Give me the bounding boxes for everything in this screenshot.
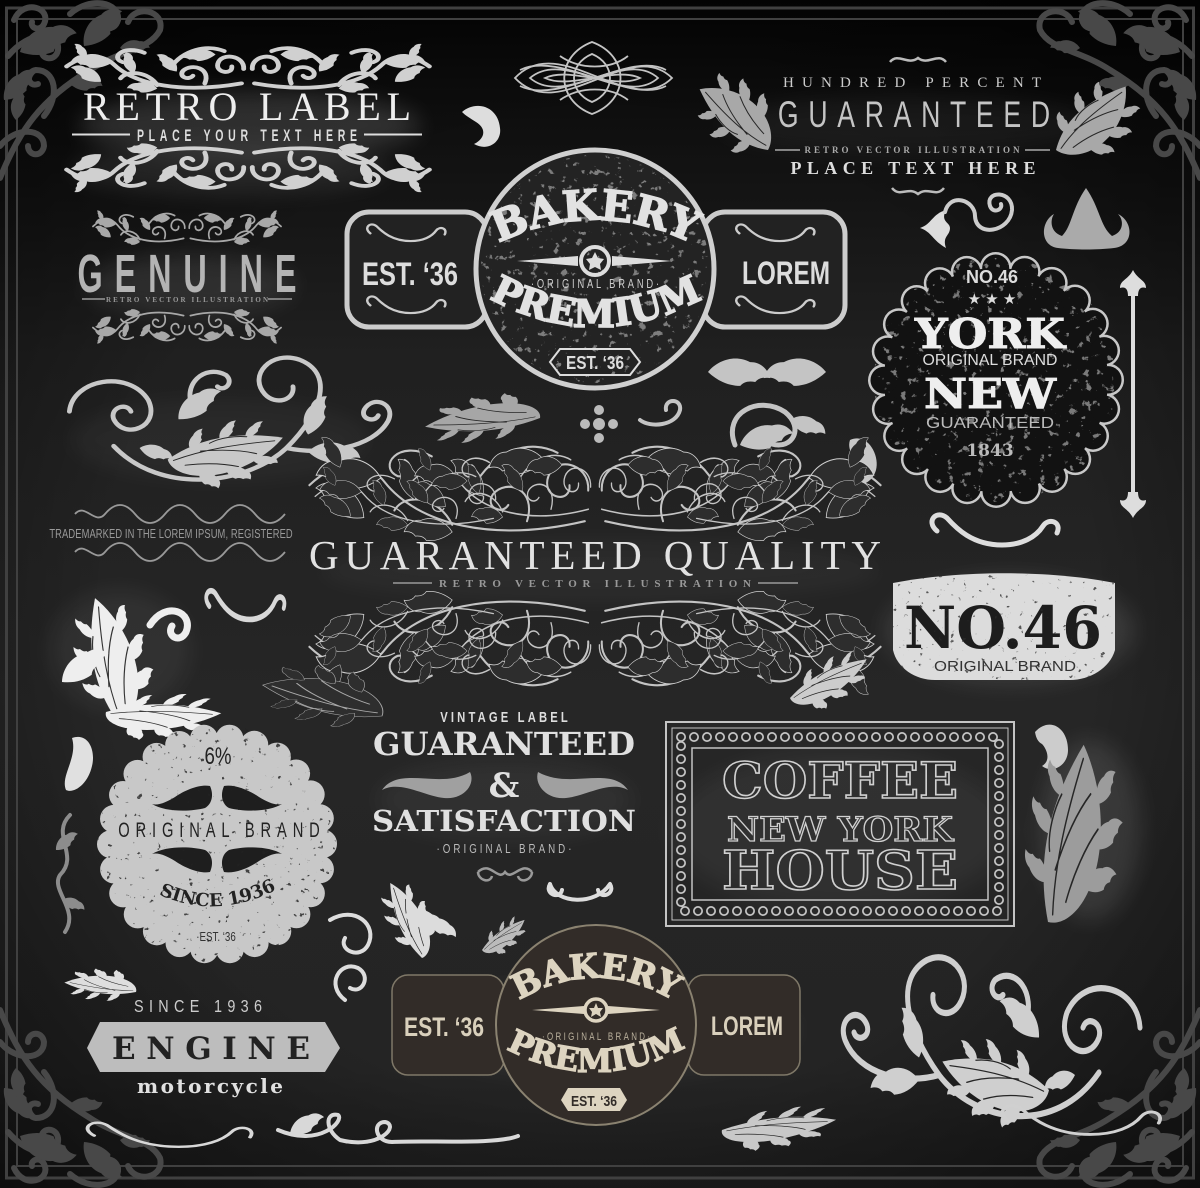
original brand: ORIGINAL BRAND [118, 818, 320, 842]
original brand: ·ORIGINAL BRAND· [542, 1031, 650, 1043]
icon: small leaf [849, 438, 877, 485]
subtitle: motorcycle [137, 1074, 283, 1098]
wear [98, 725, 336, 963]
bakery: BAKERY [508, 952, 686, 1000]
ornament: small swirl [945, 194, 1012, 230]
label: genuine [77, 209, 296, 345]
ornament: top centre knot [515, 42, 672, 114]
est tag: EST. ‘36 [571, 1093, 617, 1110]
frame: coffee new york house [666, 722, 1014, 926]
percentage: 6% [204, 743, 232, 770]
badge: york new [874, 258, 1118, 502]
ornament: scroll right [732, 405, 829, 452]
heading 2: SATISFACTION [372, 804, 636, 838]
ornament: bottom [309, 588, 881, 699]
est: ·EST. ‘36 [196, 931, 236, 944]
est tag: EST. ‘36 [566, 353, 624, 373]
swirl row top [75, 505, 285, 523]
caption: RETRO VECTOR ILLUSTRATION [804, 145, 1020, 155]
ornament: top flourish [67, 42, 429, 94]
scallop [111, 738, 323, 950]
original brand: ORIGINAL BRAND [922, 352, 1058, 369]
scallop outer [884, 268, 1108, 492]
label: vintage guaranteed satisfaction [372, 708, 636, 880]
left panel: EST. ‘36 [362, 256, 458, 292]
new: NEW [924, 370, 1057, 418]
ornament: white scroll [45, 585, 225, 752]
ornament: left acanthus [685, 66, 786, 164]
subtitle: PLACE TEXT HERE [790, 158, 1036, 178]
icon: small leaf [920, 210, 950, 248]
ornament: wave right [932, 515, 1058, 545]
premium text: PREMIUM [489, 273, 703, 328]
ornament: vertical rod [1120, 270, 1146, 518]
ornament: bottom wave right [1002, 1106, 1160, 1134]
frame lines [666, 722, 1014, 926]
heading: retro label: RETRO LABEL [83, 84, 411, 129]
no.46: NO.46 [966, 267, 1018, 287]
heading: ENGINE [112, 1031, 310, 1067]
ornament: small top right leaf [1035, 725, 1068, 769]
ornament: bottom wave left [88, 1123, 252, 1147]
wear [874, 258, 1118, 502]
star rule [517, 247, 672, 275]
label: guaranteed quality [309, 433, 881, 699]
ornament: vertical scroll left [52, 815, 87, 932]
heading: GUARANTEED QUALITY [309, 532, 881, 578]
label: hundred percent guaranteed [775, 58, 1050, 194]
right panel [703, 212, 845, 327]
ornament: small bottom scroll [892, 188, 944, 194]
ornament: top [309, 433, 881, 544]
heading: guaranteed: GUARANTEED [778, 94, 1050, 135]
york: YORK [914, 310, 1067, 358]
subtitle: ORIGINAL BRAND [934, 658, 1076, 675]
circle [476, 150, 714, 388]
scallop inner [884, 268, 1108, 492]
swirl row bottom [75, 543, 285, 561]
overline: VINTAGE LABEL [440, 708, 568, 725]
caption: RETRO VECTOR ILLUSTRATION [439, 578, 751, 590]
right panel [688, 975, 800, 1075]
ornament: feather bottom [719, 1091, 840, 1164]
heading: GUARANTEED [373, 725, 635, 763]
caption: ·ORIGINAL BRAND· [436, 843, 572, 856]
icon: leaf left [65, 737, 93, 791]
ornament: small top scroll [890, 58, 946, 62]
left panel: EST. ‘36 [404, 1012, 484, 1042]
divider: trademarked [49, 505, 293, 561]
bottom curl [478, 868, 532, 880]
ornament: acanthus middle [420, 379, 544, 460]
ornament: small curl [640, 401, 680, 425]
plate shape [893, 573, 1115, 680]
heading: genuine: GENUINE [77, 245, 297, 304]
side scrolls [382, 772, 628, 798]
badge: bakery premium [344, 148, 848, 390]
ampersand: & [489, 766, 520, 806]
since 1936: SINCE 1936 [160, 878, 274, 906]
badge: 6% original brand [97, 724, 337, 964]
est tag [550, 349, 640, 375]
label: engine motorcycle [87, 997, 340, 1098]
bakery text: BAKERY [488, 188, 705, 243]
caption: RETRO VECTOR ILLUSTRATION [106, 296, 268, 304]
ornament: outlined feather [262, 663, 383, 730]
new york: NEW YORK [727, 810, 954, 850]
ornament: small feather left [63, 963, 137, 1007]
original brand: ·ORIGINAL BRAND· [531, 278, 659, 291]
ornament: big feather right [1010, 741, 1135, 925]
ornament: curl [549, 884, 611, 900]
icon: diamond ornament [580, 405, 618, 443]
subtitle: place your text here: PLACE YOUR TEXT HERE [137, 125, 357, 145]
tag [87, 1022, 340, 1072]
ornament: right acanthus [1042, 66, 1149, 175]
ornament: bottom flourish [67, 142, 429, 194]
left panel [392, 975, 504, 1075]
est tag [561, 1088, 627, 1111]
guaranteed: GUARANTEED [926, 415, 1054, 432]
right panel: LOREM [742, 255, 830, 291]
wear [893, 573, 1115, 680]
heading: NO.46 [904, 594, 1102, 662]
ornament: top [93, 209, 281, 246]
moustache bottom [152, 847, 282, 872]
ornament: small wave [206, 591, 284, 619]
coffee: COFFEE [722, 751, 958, 810]
circle distress [481, 155, 709, 383]
ornament: bottom [93, 308, 281, 345]
text: TRADEMARKED IN THE LOREM IPSUM, REGISTERED [49, 528, 293, 541]
plate: no.46 [893, 573, 1115, 680]
overline text: HUNDRED PERCENT [783, 75, 1041, 91]
circle [496, 925, 696, 1125]
ornament: small scroll pair [706, 353, 828, 393]
ornament: big vine right [843, 957, 1140, 1154]
year: 1843 [966, 441, 1014, 461]
ornament: small feather [477, 907, 532, 965]
moustache top [152, 786, 282, 811]
star rule [532, 999, 660, 1021]
ornament: leaf scroll [784, 635, 877, 727]
ornament: bottom scroll centre [278, 1110, 518, 1142]
label: retro label [67, 42, 429, 194]
ornament: big vine left [69, 358, 390, 509]
left panel [347, 212, 487, 327]
stars: ★ ★ ★ [968, 291, 1016, 308]
ornament: leaf cluster [364, 873, 460, 964]
house: HOUSE [722, 840, 958, 902]
chalk smudges [50, 91, 1140, 1080]
badge: bottom bakery [391, 924, 801, 1126]
overline: SINCE 1936 [134, 997, 262, 1016]
icon: fleur right [1044, 188, 1130, 250]
icon: small leaf [462, 106, 500, 147]
ornament: swirl group [330, 915, 370, 1000]
right panel: LOREM [711, 1011, 783, 1041]
premium: PREMIUM [506, 1026, 686, 1073]
